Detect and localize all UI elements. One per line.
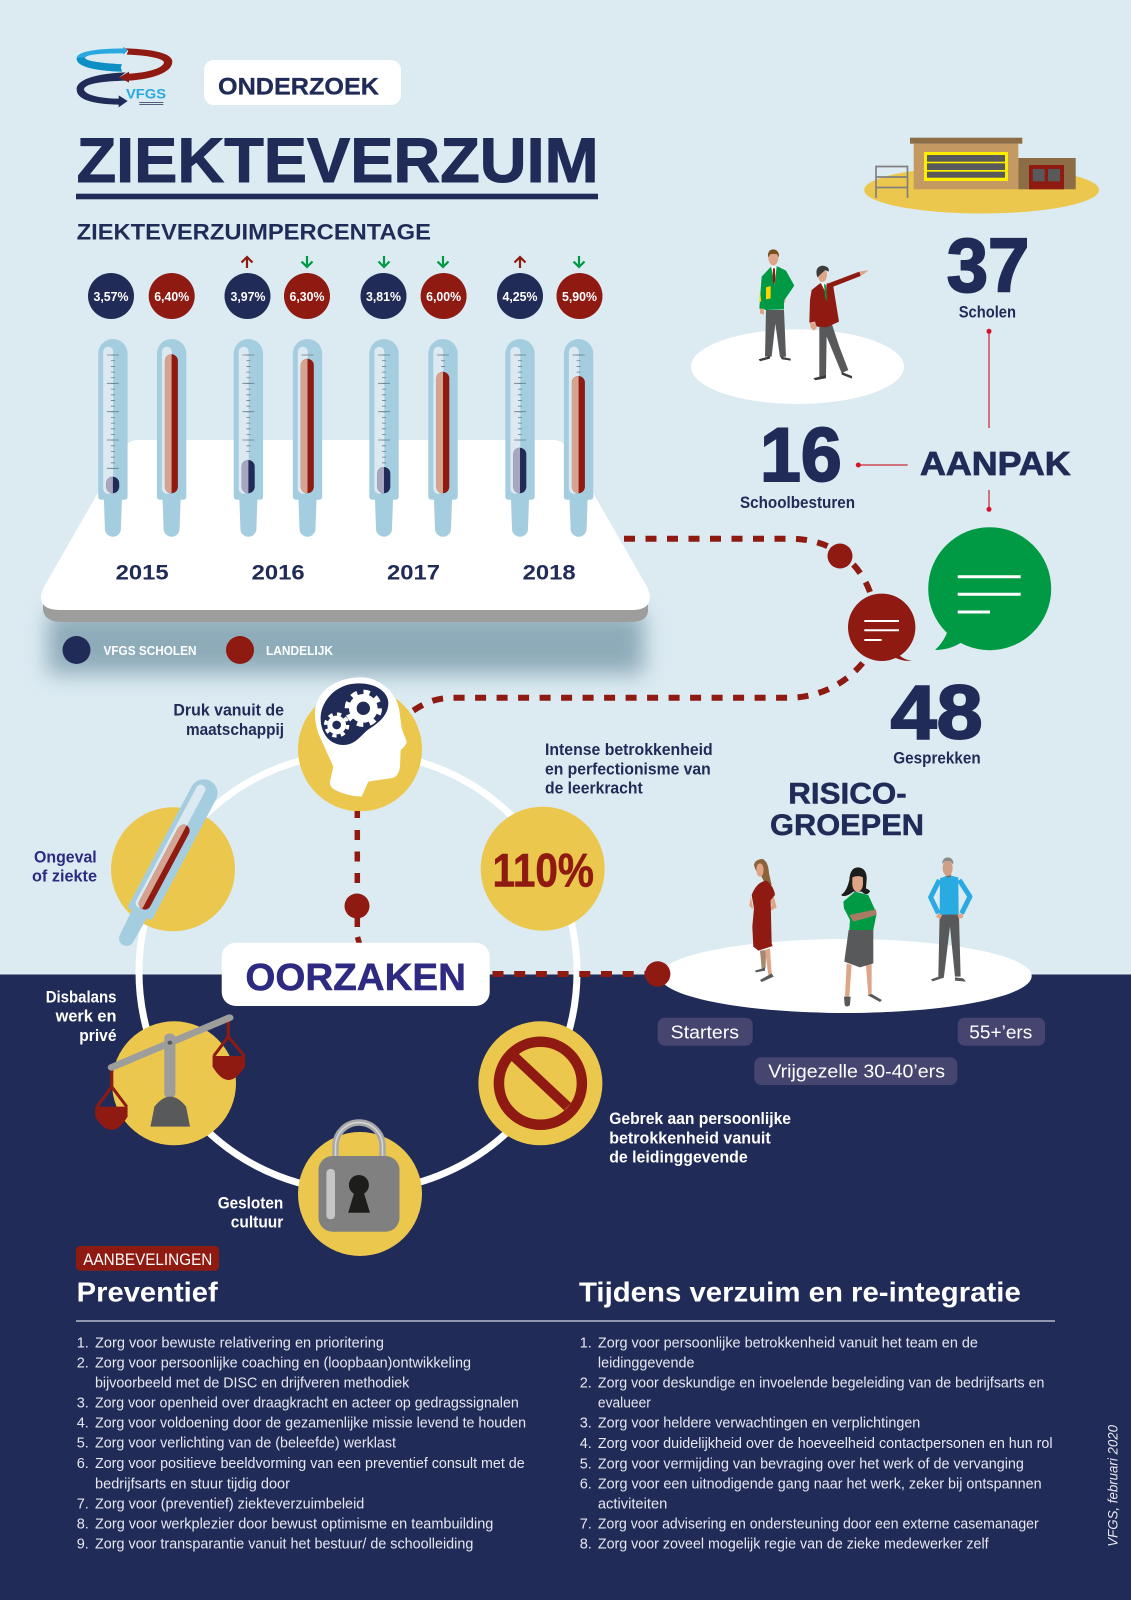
label: ongeval of ziekte: Ongeval <box>34 848 97 866</box>
connector dot at risk groups <box>645 961 670 987</box>
stat: 16 schoolbesturen <box>740 413 855 512</box>
list: tijdens verzuim en re-integratie: 1. <box>580 1335 592 1351</box>
label: gebrek aan betrokkenheid <box>609 1110 791 1166</box>
icon: red speech bubble <box>848 594 915 661</box>
heading: ZIEKTEVERZUIMPERCENTAGE: ZIEKTEVERZUIMPERCENTAGE <box>77 219 431 244</box>
tag: Vrijgezelle 30-40'ers: Vrijgezelle 30-40’ers <box>768 1061 945 1082</box>
list: preventief: 3. <box>77 1396 89 1412</box>
tag: 55+'ers: 55+’ers <box>969 1021 1032 1042</box>
credit line: VFGS, februari 2020 <box>1104 1425 1120 1547</box>
label: druk vanuit de maatschappij <box>173 702 284 739</box>
connector lines around AANPAK <box>856 329 992 512</box>
list: tijdens verzuim en re-integratie: activiteiten <box>598 1496 667 1512</box>
dashed connector: platform to AANPAK bubble <box>624 539 870 592</box>
percentage badges: 5,90% <box>562 289 597 304</box>
heading: Tijdens verzuim en re-integratie: Tijdens verzuim en re-integratie <box>579 1277 1021 1308</box>
dashed connector: head to oorzaken <box>357 811 360 944</box>
label: gesloten cultuur: cultuur <box>231 1214 284 1232</box>
list: preventief: 4. <box>77 1416 89 1432</box>
label: druk vanuit de maatschappij: Druk vanuit de <box>173 702 284 720</box>
list: preventief: 8. <box>77 1516 89 1532</box>
heading: RISICO-GROEPEN: RISICO- <box>788 777 907 810</box>
connector dot <box>344 894 370 918</box>
thermometer 2017 landelijk <box>428 339 458 537</box>
cause: intense betrokkenheid, 110% <box>481 807 605 931</box>
list: preventief: 6. <box>77 1456 89 1472</box>
list: tijdens verzuim en re-integratie: 2. <box>580 1376 592 1392</box>
label: intense betrokkenheid <box>545 741 713 797</box>
stat: 48 gesprekken: 48 <box>891 670 983 756</box>
trend arrows <box>242 256 584 268</box>
year labels: 2015 <box>116 561 169 584</box>
list: preventief: Zorg voor voldoening door de gezamenlijke missie levend te houden <box>95 1416 526 1432</box>
list: tijdens verzuim en re-integratie <box>580 1335 1053 1553</box>
percentage badges: 6,30% <box>290 289 325 304</box>
list: tijdens verzuim en re-integratie: Zorg voor advisering en ondersteuning door een externe casemanager <box>598 1517 1039 1533</box>
label: gebrek aan betrokkenheid: Gebrek aan persoonlijke <box>609 1110 791 1128</box>
label: disbalans werk en prive <box>46 988 117 1045</box>
logo: VFGS <box>77 47 172 107</box>
label: intense betrokkenheid: de leerkracht <box>545 779 643 797</box>
list: tijdens verzuim en re-integratie: 4. <box>580 1436 592 1452</box>
label: AANBEVELINGEN <box>76 1246 219 1271</box>
list: tijdens verzuim en re-integratie: 6. <box>580 1476 592 1492</box>
background: light upper area <box>0 0 1131 975</box>
cause: intense betrokkenheid, 110%: 110% <box>492 844 594 897</box>
list: preventief: 7. <box>77 1496 89 1512</box>
list: tijdens verzuim en re-integratie: Zorg voor heldere verwachtingen en verplichtingen <box>598 1416 920 1432</box>
label: gebrek aan betrokkenheid: de leidinggevende <box>609 1148 748 1166</box>
causes ring <box>139 753 577 1191</box>
label: ongeval of ziekte <box>32 848 97 886</box>
platform <box>41 440 650 622</box>
percentage badges: 6,00% <box>426 289 462 304</box>
thermometer 2015 VFGS <box>98 339 128 537</box>
illustration: three people on white ellipse <box>660 857 1032 1013</box>
list: tijdens verzuim en re-integratie: evalueer <box>598 1396 651 1412</box>
legend: LANDELIJK <box>266 643 334 658</box>
list: tijdens verzuim en re-integratie: Zorg voor deskundige en invoelende begeleiding van de bedrijfsarts en <box>598 1376 1044 1392</box>
list: tijdens verzuim en re-integratie: Zorg voor zoveel mogelijk regie van de zieke medewerker zelf <box>598 1537 990 1553</box>
thermometer 2018 VFGS <box>505 339 535 537</box>
label: gebrek aan betrokkenheid: betrokkenheid vanuit <box>609 1129 771 1147</box>
list: tijdens verzuim en re-integratie: leidinggevende <box>598 1355 694 1371</box>
percentage badges: 3,97% <box>230 289 266 304</box>
heading: RISICO-GROEPEN <box>770 777 924 842</box>
list: preventief: Zorg voor transparantie vanuit het bestuur/ de schoolleiding <box>95 1537 473 1553</box>
dashed connector: bubble to causes <box>413 663 863 711</box>
thermometer 2016 VFGS <box>234 339 263 537</box>
label box: OORZAKEN <box>222 943 490 1006</box>
label: intense betrokkenheid: en perfectionisme van <box>545 760 711 778</box>
percentage badges: 3,81% <box>366 289 401 304</box>
list: preventief: Zorg voor persoonlijke coaching en (loopbaan)ontwikkeling <box>95 1355 471 1371</box>
list: preventief: bedrijfsarts en stuur tijdig door <box>95 1476 290 1492</box>
list: preventief <box>77 1335 526 1553</box>
label: disbalans werk en prive: privé <box>79 1027 116 1045</box>
icon: green speech bubble <box>928 527 1051 650</box>
year labels: 2016 <box>252 561 305 584</box>
heading: Preventief: Preventief <box>77 1277 218 1308</box>
label: intense betrokkenheid: Intense betrokkenheid <box>545 741 713 759</box>
label: druk vanuit de maatschappij: maatschappij <box>186 721 284 739</box>
cause: druk vanuit de maatschappij <box>298 677 422 811</box>
platform shadow <box>48 612 644 674</box>
list: tijdens verzuim en re-integratie: 3. <box>580 1416 592 1432</box>
list: tijdens verzuim en re-integratie: Zorg voor persoonlijke betrokkenheid vanuit het team en de <box>598 1335 978 1351</box>
cause: gesloten cultuur <box>298 1122 422 1256</box>
year labels: 2018 <box>523 561 576 584</box>
percentage badges: 6,40% <box>154 289 190 304</box>
stat: 37 scholen: Scholen <box>959 304 1016 322</box>
label: gesloten cultuur: Gesloten <box>218 1194 283 1212</box>
tag: 55+'ers <box>958 1018 1045 1046</box>
list: tijdens verzuim en re-integratie: Zorg voor duidelijkheid over de hoeveelheid contactpersonen en hun rol <box>598 1436 1053 1452</box>
illustration: two men on white ellipse <box>691 249 904 404</box>
thermometer 2015 landelijk <box>157 339 186 537</box>
title: ZIEKTEVERZUIM: ZIEKTEVERZUIM <box>77 126 599 196</box>
thermometer 2018 landelijk <box>564 339 593 537</box>
list: tijdens verzuim en re-integratie: 8. <box>580 1537 592 1553</box>
list: tijdens verzuim en re-integratie: Zorg voor vermijding van bevraging over het werk of de vervanging <box>598 1456 1024 1472</box>
legend <box>62 636 334 664</box>
list: preventief: Zorg voor verlichting van de (beleefde) werklast <box>95 1436 396 1452</box>
thermometer 2017 VFGS <box>369 339 399 537</box>
cause: disbalans werk en prive <box>95 1018 245 1145</box>
label: AANBEVELINGEN: AANBEVELINGEN <box>83 1251 212 1269</box>
list: tijdens verzuim en re-integratie: 5. <box>580 1456 592 1472</box>
list: preventief: 5. <box>77 1436 89 1452</box>
cause: gebrek aan betrokkenheid <box>478 1021 602 1145</box>
dashed connector: oorzaken to risk groups <box>492 971 650 977</box>
list: preventief: 2. <box>77 1355 89 1371</box>
tag: Starters <box>658 1018 753 1046</box>
legend: VFGS SCHOLEN <box>104 643 196 658</box>
label box: ONDERZOEK: ONDERZOEK <box>218 74 380 100</box>
logo: VFGS: VFGS <box>126 86 166 101</box>
background: navy lower area <box>0 974 1131 1600</box>
list: preventief: Zorg voor bewuste relativering en prioritering <box>95 1335 384 1351</box>
stat: 37 scholen: 37 <box>947 224 1029 308</box>
percentage badges <box>88 273 602 319</box>
heading: RISICO-GROEPEN: GROEPEN <box>770 809 924 842</box>
list: preventief: 1. <box>77 1335 89 1351</box>
label box: ONDERZOEK <box>204 60 401 105</box>
percentage badges: 4,25% <box>502 289 538 304</box>
stat: 16 schoolbesturen: 16 <box>760 413 842 498</box>
label: ongeval of ziekte: of ziekte <box>32 868 97 886</box>
tag: Starters: Starters <box>671 1021 739 1042</box>
label: disbalans werk en prive: Disbalans <box>46 988 117 1006</box>
list: preventief: 9. <box>77 1537 89 1553</box>
label: disbalans werk en prive: werk en <box>55 1008 116 1026</box>
percentage badges: 3,57% <box>94 289 129 304</box>
year labels: 2017 <box>387 561 440 584</box>
label box: OORZAKEN: OORZAKEN <box>245 957 466 999</box>
list: preventief: Zorg voor positieve beeldvorming van een preventief consult met de <box>95 1456 525 1472</box>
tag: Vrijgezelle 30-40'ers <box>754 1057 957 1085</box>
list: preventief: Zorg voor openheid over draagkracht en acteer op gedragssignalen <box>95 1396 519 1412</box>
label: gesloten cultuur <box>218 1194 284 1232</box>
year labels <box>116 561 576 584</box>
thermometer chart <box>98 339 593 537</box>
list: tijdens verzuim en re-integratie: 7. <box>580 1517 592 1533</box>
stat: 48 gesprekken: Gesprekken <box>893 749 981 767</box>
cause: ongeval of ziekte <box>111 774 235 951</box>
school illustration <box>864 138 1099 214</box>
list: tijdens verzuim en re-integratie: Zorg voor een uitnodigende gang naar het werk, zeker bij ontspannen <box>598 1476 1042 1492</box>
stat: 16 schoolbesturen: Schoolbesturen <box>740 494 855 512</box>
list: preventief: bijvoorbeeld met de DISC en drijfveren methodiek <box>95 1375 410 1391</box>
thermometer 2016 landelijk <box>293 339 322 537</box>
heading: AANPAK: AANPAK <box>920 445 1071 482</box>
list: preventief: Zorg voor (preventief) ziekteverzuimbeleid <box>95 1496 364 1512</box>
connector dot <box>828 544 852 568</box>
list: preventief: Zorg voor werkplezier door bewust optimisme en teambuilding <box>95 1516 493 1532</box>
